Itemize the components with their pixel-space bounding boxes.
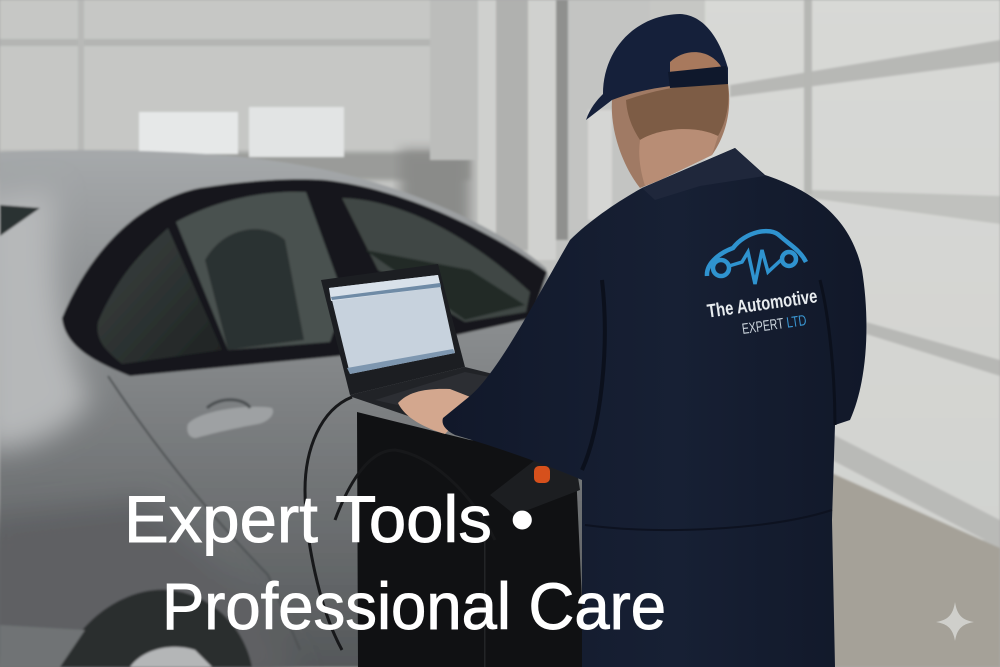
- logo text: The Automotive: [706, 286, 819, 323]
- technician body: [442, 148, 866, 667]
- roller door right: [650, 0, 1000, 667]
- car windows: [62, 179, 547, 376]
- centre pillars: [430, 0, 650, 260]
- logo: car outline: [707, 231, 806, 284]
- headline text: Professional Care: [162, 569, 666, 643]
- car body: [0, 150, 590, 667]
- headline text: [124, 482, 666, 643]
- headline text: Expert Tools •: [124, 482, 534, 556]
- cables: [305, 397, 495, 650]
- door handle: [187, 400, 273, 438]
- laptop: [321, 264, 501, 420]
- sparkle watermark: [936, 602, 974, 641]
- diagnostic cart: [357, 412, 585, 667]
- logo text: EXPERT: [741, 315, 785, 338]
- hand: [398, 389, 478, 434]
- logo text: [706, 286, 821, 342]
- logo text: LTD: [785, 312, 808, 332]
- cap: [586, 14, 728, 120]
- neck and head: [612, 82, 729, 188]
- door seam: [108, 376, 300, 650]
